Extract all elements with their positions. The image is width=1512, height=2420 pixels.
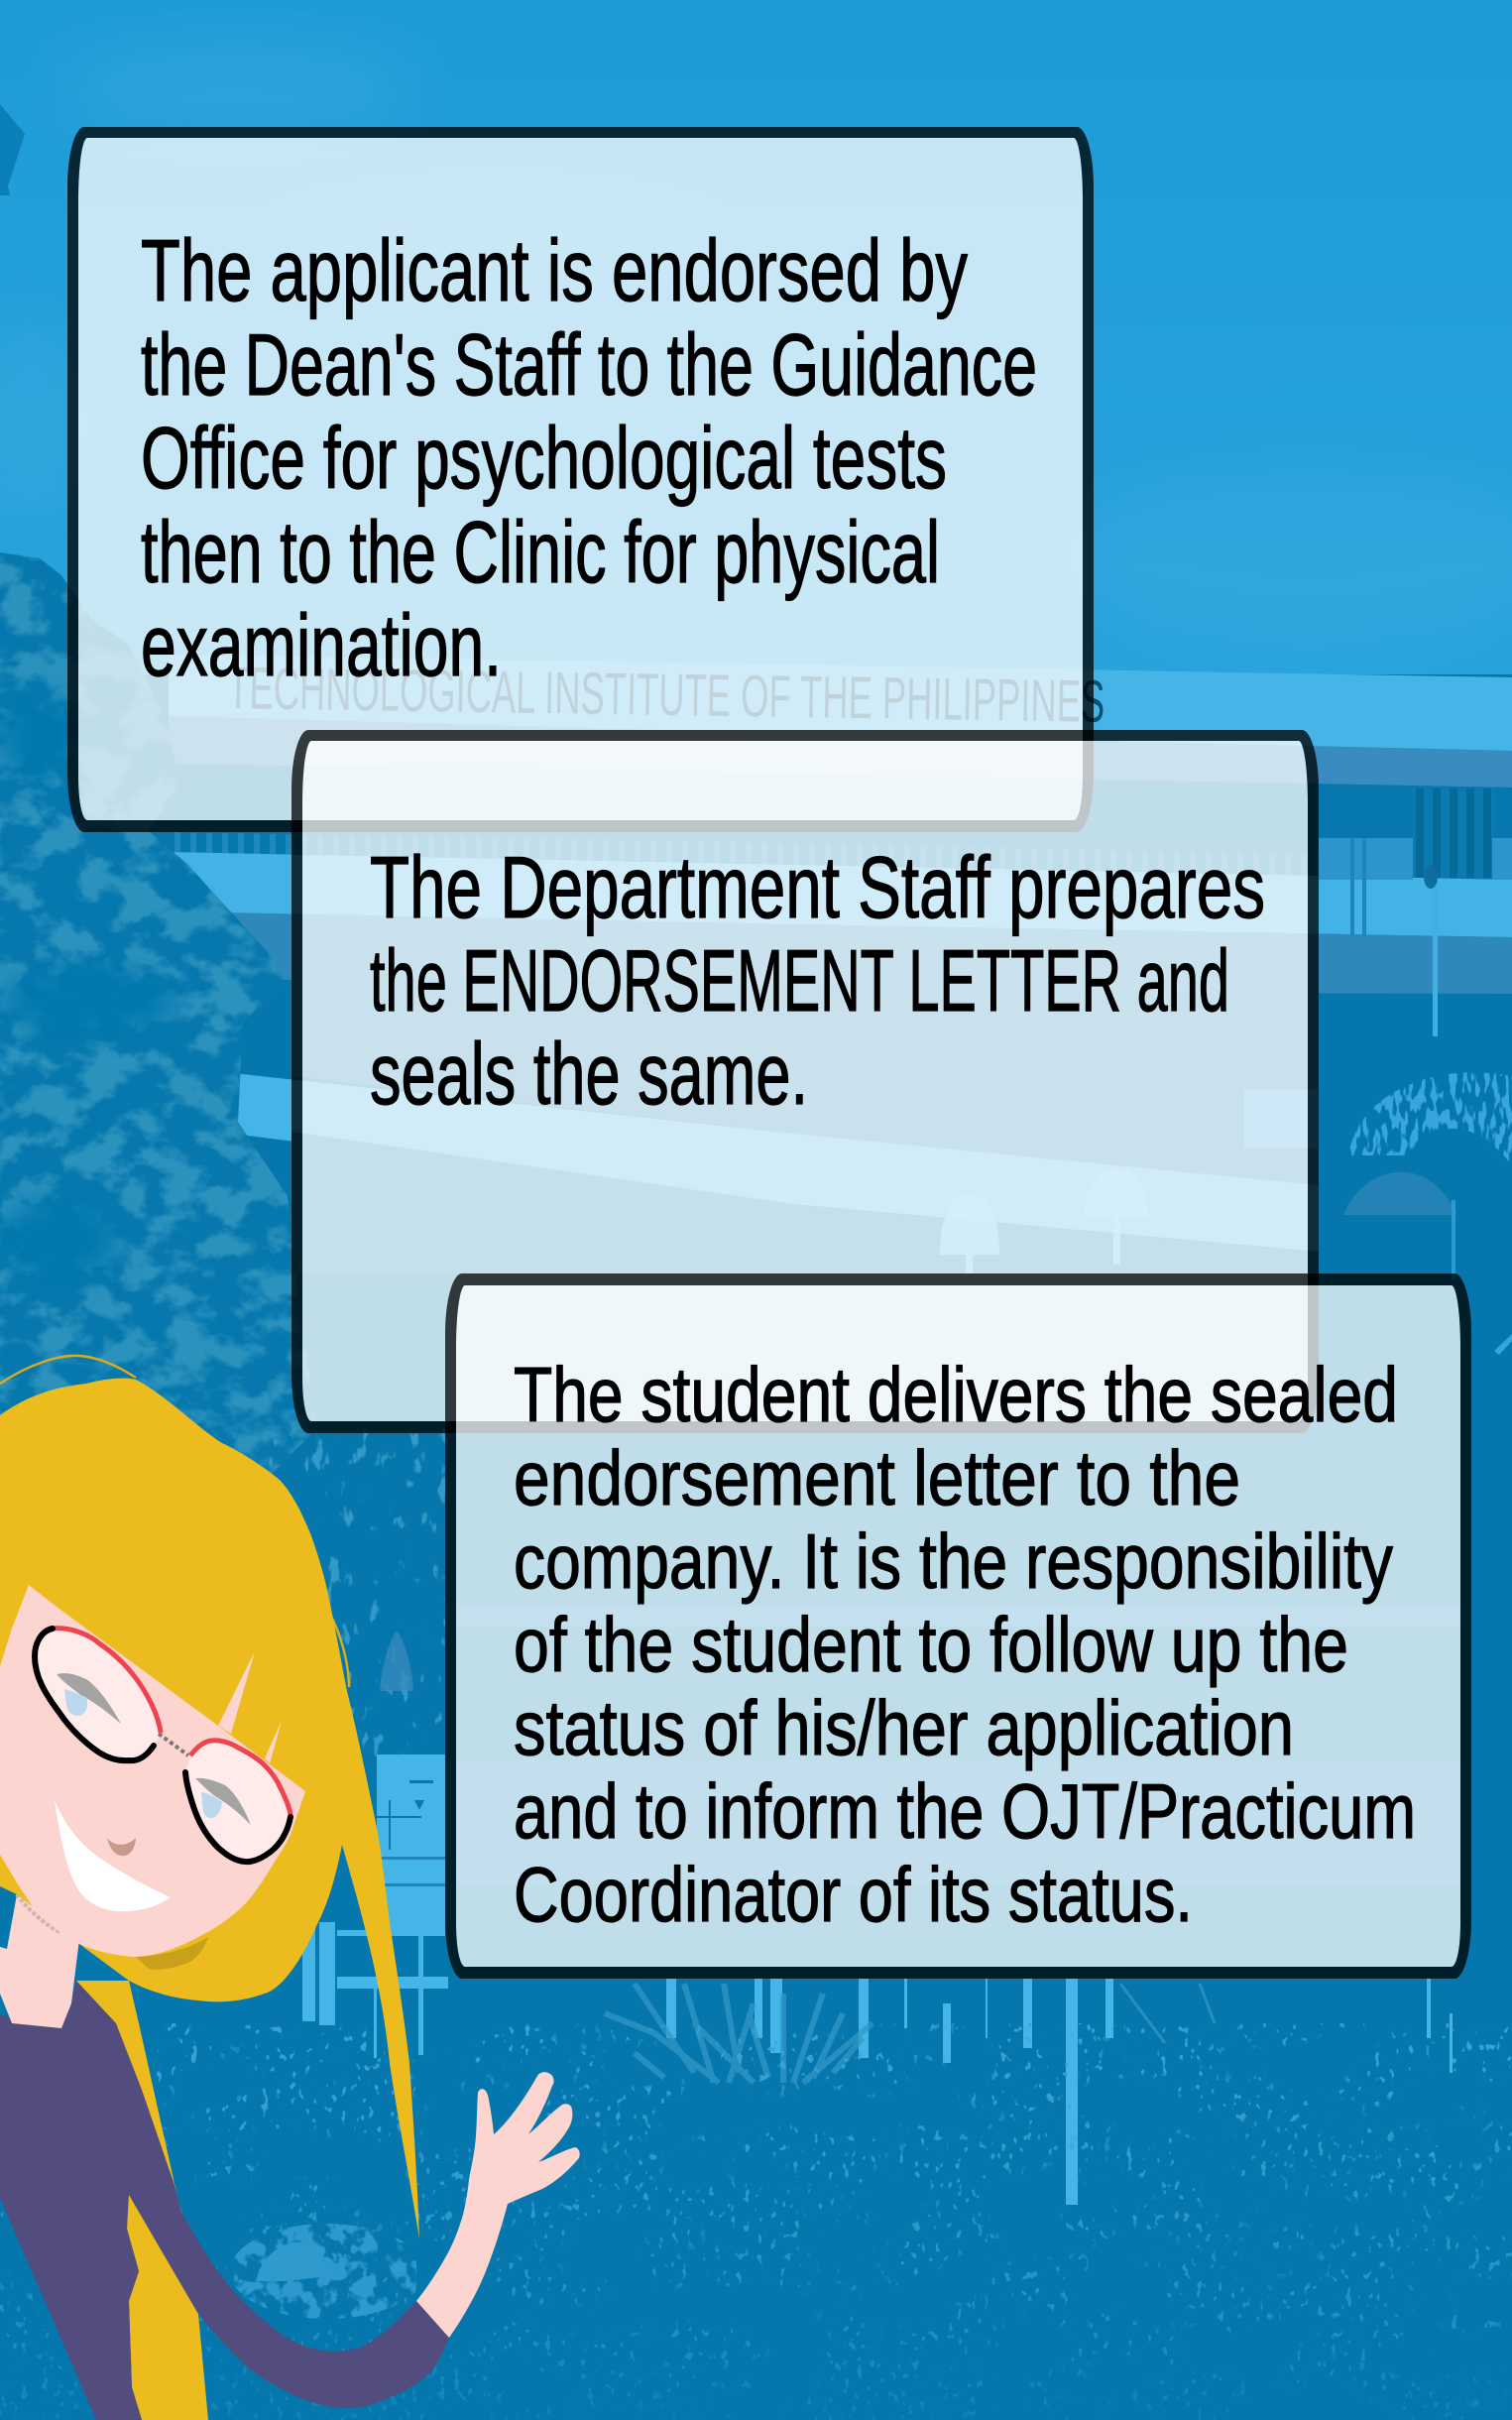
background photo: plant fronds bbox=[605, 1984, 1215, 2083]
panel 3 text: Coordinator of its status. bbox=[514, 1851, 1193, 1938]
panel 2 fill bbox=[302, 741, 1308, 1421]
hair outline strands bbox=[0, 1356, 349, 1687]
upper hair lock behind sweater bbox=[76, 1981, 188, 2232]
panel 1 text: then to the Clinic for physical bbox=[141, 503, 940, 601]
panel 3 text: endorsement letter to the bbox=[514, 1434, 1240, 1521]
background photo: columns below panel 3 bbox=[666, 1979, 1453, 2205]
collar line bbox=[17, 1894, 59, 1932]
chin shadow bbox=[136, 1937, 208, 1970]
background photo: lower building left of panel 3 bbox=[302, 1754, 448, 2058]
background photo: sky bbox=[0, 0, 1512, 694]
background photo: foliage left of the panels bbox=[0, 536, 456, 1755]
face bbox=[0, 1585, 305, 1957]
panel: step 3 bbox=[445, 1273, 1471, 1979]
panel 3 text: status of his/her application bbox=[514, 1684, 1294, 1771]
panel 1 text: examination. bbox=[141, 596, 502, 694]
hand bbox=[416, 2072, 580, 2338]
panel 3 border bbox=[445, 1273, 1471, 1979]
panel 2 text: seals the same. bbox=[370, 1025, 808, 1123]
background photo: lamp posts bbox=[940, 1168, 1148, 1273]
smile bbox=[55, 1800, 171, 1911]
panel: step 1 bbox=[67, 127, 1094, 832]
hair main shape bbox=[0, 1379, 419, 2238]
panel 3 text bbox=[514, 1351, 1416, 1938]
glasses left lens bbox=[35, 1629, 161, 1760]
background photo: right palm tree and pole bbox=[1343, 865, 1512, 1355]
panel: step 2 bbox=[291, 730, 1319, 1433]
neck bbox=[0, 1894, 79, 2028]
nose bbox=[107, 1838, 136, 1856]
background photo: bushes bbox=[0, 2023, 1512, 2420]
background photo: shrub highlight in arm crook bbox=[234, 2224, 416, 2319]
background photo: tower silhouette at top left bbox=[0, 104, 25, 195]
panel 1 text: Office for psychological tests bbox=[141, 409, 947, 507]
glasses bridge bbox=[159, 1734, 188, 1755]
panel 3 fill bbox=[456, 1285, 1460, 1967]
lower hair lock bbox=[127, 2195, 208, 2420]
sweater and arm bbox=[0, 1981, 449, 2420]
panel 1 fill bbox=[78, 138, 1083, 820]
panel 3 text: of the student to follow up the bbox=[514, 1601, 1348, 1688]
panel 1 text bbox=[141, 221, 1037, 694]
panel 2 border bbox=[291, 730, 1319, 1433]
panel 1 text: the Dean's Staff to the Guidance bbox=[141, 315, 1037, 414]
panel 2 text bbox=[370, 838, 1265, 1123]
hair bang spikes bbox=[218, 1651, 282, 1763]
glasses right lens bbox=[185, 1741, 291, 1862]
panel 1 border bbox=[67, 127, 1094, 832]
character: blonde student waving bbox=[0, 1356, 580, 2420]
background photo: building floors bbox=[0, 655, 1512, 2420]
panel 1 text: The applicant is endorsed by bbox=[141, 221, 968, 319]
